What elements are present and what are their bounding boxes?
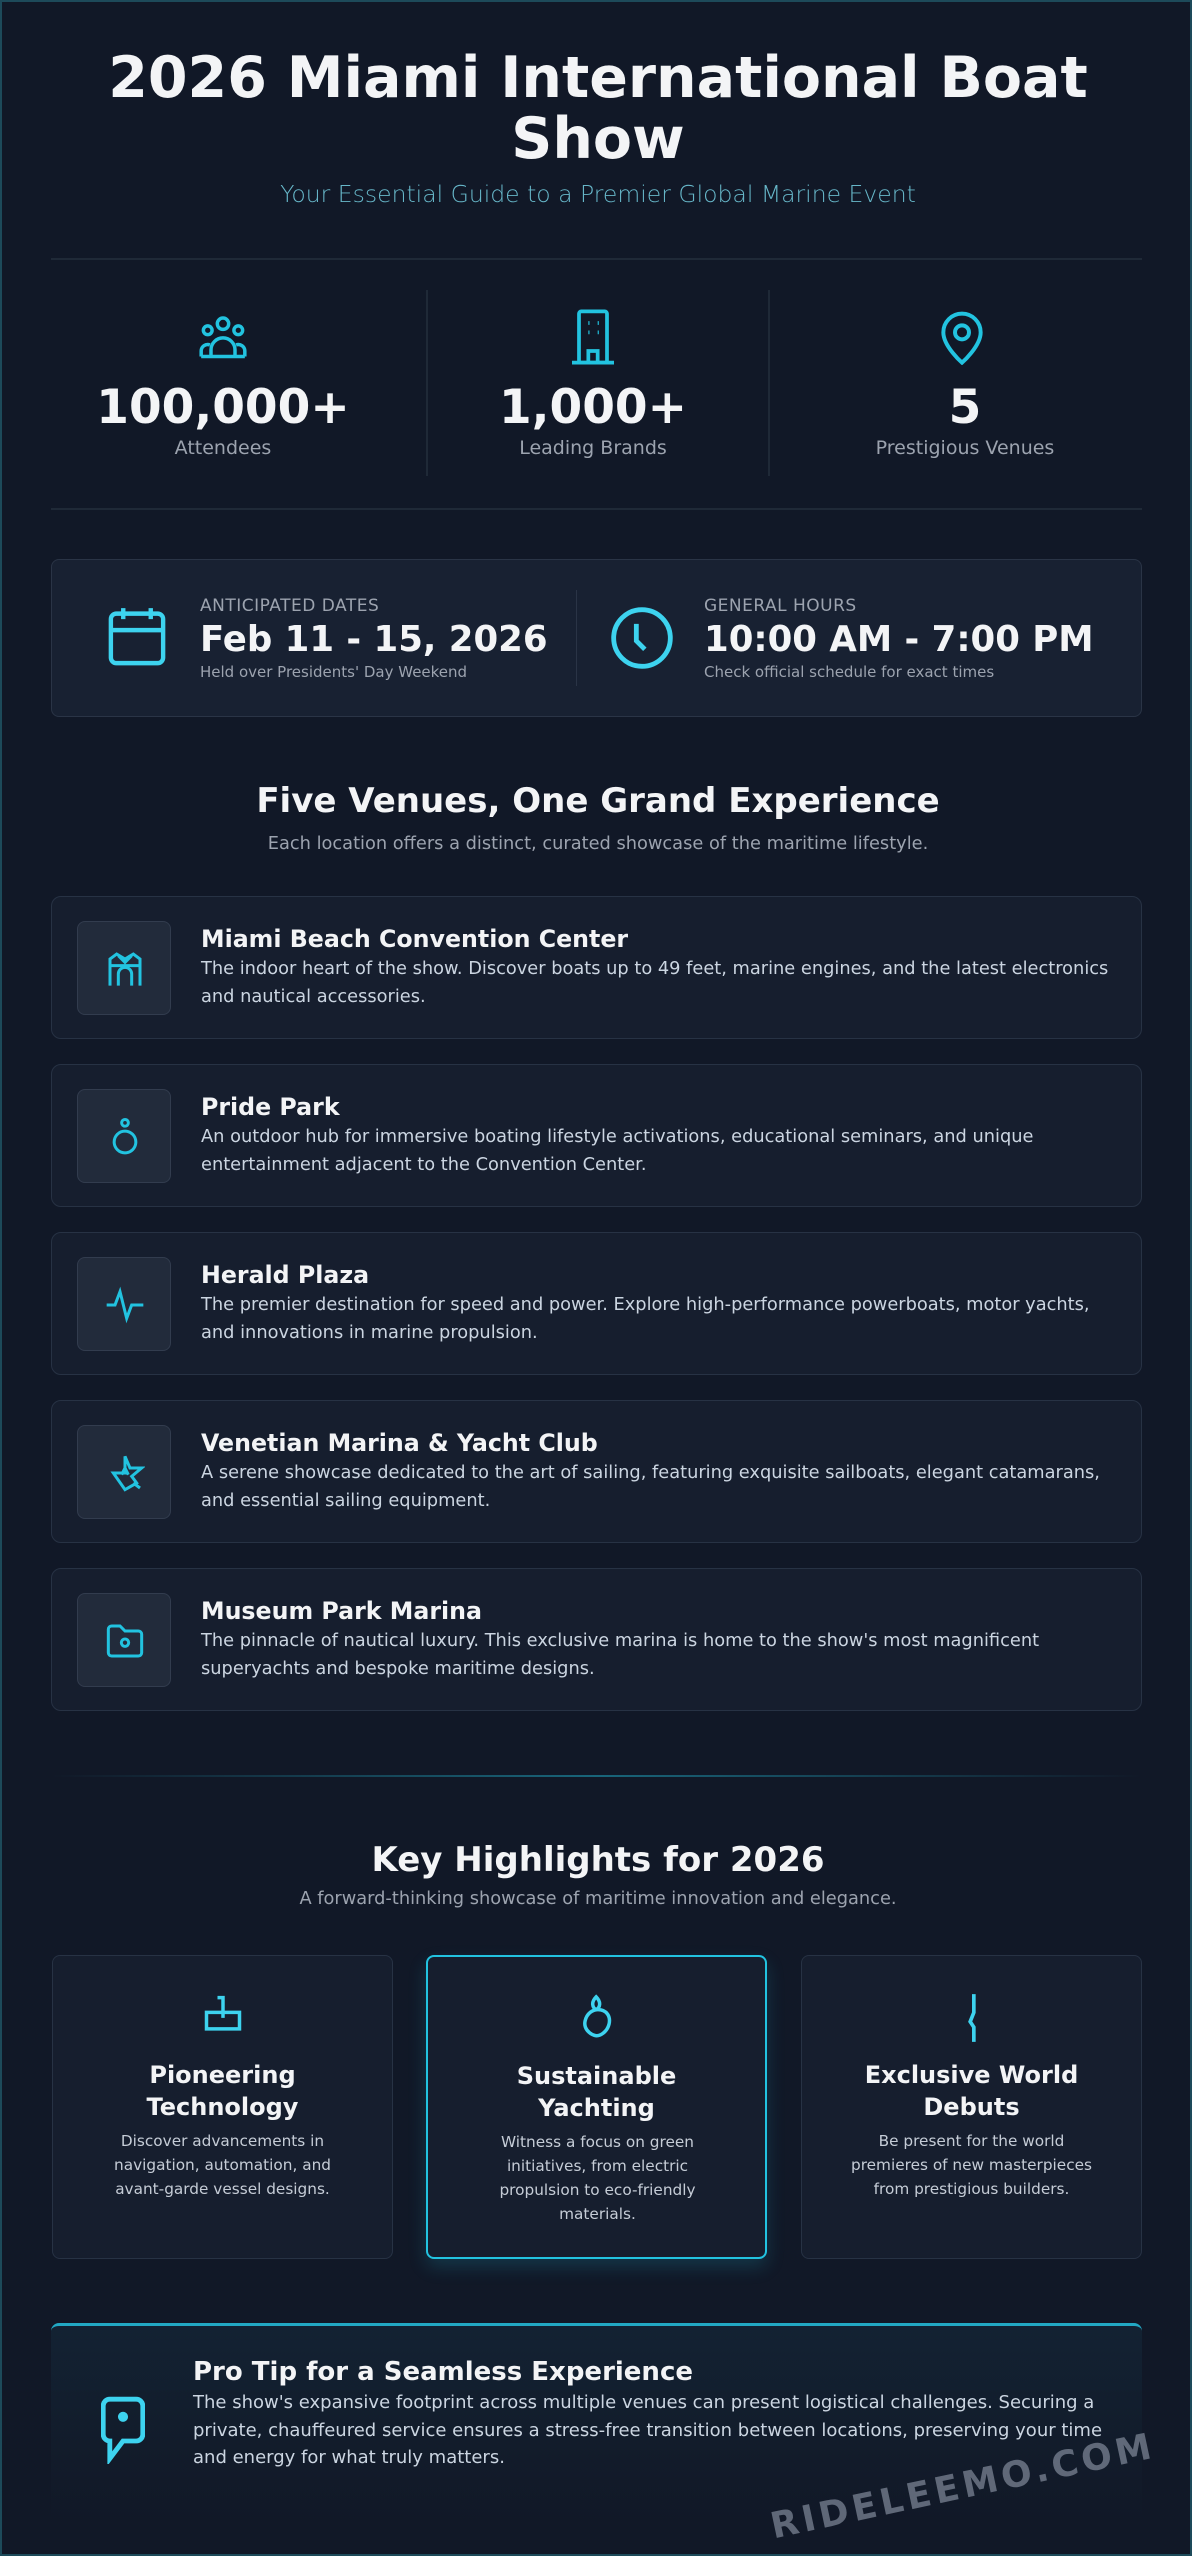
watermark: RIDELEEMO.COM — [767, 2426, 1159, 2547]
card: Herald Plaza: The premier destination for speed and power. Explore high-performance powerboats, motor yachts, and innovations in marine propulsion. — [201, 1294, 1090, 1343]
card: Sustainable Yachting: Sustainable — [517, 2062, 676, 2090]
panel: dates and hours — [51, 559, 1142, 717]
panel: dates and hours: ANTICIPATED DATES — [200, 596, 379, 616]
title: Show — [511, 106, 685, 172]
panel: dates and hours: Held over Presidents' Day Weekend — [200, 663, 467, 681]
card: Pioneering Technology: Pioneering — [149, 2061, 296, 2089]
panel: dates and hours: GENERAL HOURS — [704, 596, 857, 616]
icon: tech — [204, 1996, 242, 2031]
card: Exclusive World Debuts: Be present for the world premieres of new masterpieces from prestigious builders. — [851, 2132, 1092, 2198]
icon: people — [199, 316, 247, 358]
callout: pro tip: Pro Tip for a Seamless Experience — [193, 2357, 693, 2387]
stat: attendees: Attendees — [175, 437, 271, 459]
title: 2026 Miami International Boat — [108, 45, 1088, 111]
subtitle: Your Essential Guide to a Premier Global Marine Event — [280, 180, 916, 208]
card: Miami Beach Convention Center — [51, 896, 1142, 1039]
card: Venetian Marina & Yacht Club: A serene showcase dedicated to the art of sailing, featuring exquisite sailboats, elegant catamarans, and essential sailing equipment. — [201, 1462, 1100, 1511]
card: Sustainable Yachting: Yachting — [538, 2094, 655, 2122]
icon: star sail — [77, 1425, 171, 1519]
card: Herald Plaza — [51, 1232, 1142, 1375]
stat: brands: Leading Brands — [519, 437, 667, 459]
subheading: highlights: A forward-thinking showcase of maritime innovation and elegance. — [299, 1888, 897, 1909]
card: Museum Park Marina: Museum Park Marina — [201, 1597, 482, 1625]
card: Exclusive World Debuts: Exclusive World — [865, 2061, 1078, 2089]
card: Museum Park Marina — [51, 1568, 1142, 1711]
card: Pioneering Technology: Technology — [147, 2093, 298, 2121]
card: Museum Park Marina: The pinnacle of nautical luxury. This exclusive marina is home to the show's most magnificent superyachts and bespoke maritime designs. — [201, 1630, 1039, 1679]
icon: speech bubble — [101, 2396, 145, 2464]
panel: dates and hours: Check official schedule for exact times — [704, 663, 994, 681]
card: Exclusive World Debuts — [801, 1955, 1142, 2259]
icon: folder — [77, 1593, 171, 1687]
stat: attendees — [96, 316, 350, 459]
card: Pride Park — [51, 1064, 1142, 1207]
card: Pride Park: An outdoor hub for immersive boating lifestyle activations, educational seminars, and unique entertainment adjacent to the Convention Center. — [201, 1126, 1033, 1175]
card: Pride Park: Pride Park — [201, 1093, 340, 1121]
icon: convention — [77, 921, 171, 1015]
callout: pro tip — [51, 2323, 1142, 2523]
panel: dates and hours: 10:00 AM - 7:00 PM — [704, 619, 1094, 660]
card: Venetian Marina & Yacht Club — [51, 1400, 1142, 1543]
icon: leaf drop — [583, 1994, 612, 2038]
icon: building — [572, 310, 614, 364]
card: Miami Beach Convention Center: Miami Beach Convention Center — [201, 925, 628, 953]
stat: venues: 5 — [949, 380, 981, 435]
subheading: venues: Each location offers a distinct, curated showcase of the maritime lifestyle. — [268, 833, 928, 854]
icon: location pin — [941, 312, 983, 365]
icon: calendar — [108, 608, 166, 666]
callout: pro tip: The show's expansive footprint across multiple venues can present logistical challenges. Securing a private, chauffeured service ensures a stress-free transition between locations, preserving your time and energy for what truly matters. — [193, 2392, 1102, 2468]
card: Sustainable Yachting: Witness a focus on green initiatives, from electric propulsion to eco-friendly materials. — [499, 2133, 696, 2223]
icon: ring — [77, 1089, 171, 1183]
stat: brands: 1,000+ — [499, 380, 687, 435]
title — [108, 45, 1088, 172]
card: Venetian Marina & Yacht Club: Venetian Marina & Yacht Club — [201, 1429, 598, 1457]
icon: clock — [611, 607, 673, 669]
card: Sustainable Yachting — [426, 1955, 767, 2259]
heading: venues: Five Venues, One Grand Experience — [256, 781, 940, 821]
panel: dates and hours: Feb 11 - 15, 2026 — [200, 619, 548, 660]
card: Exclusive World Debuts: Debuts — [923, 2093, 1020, 2121]
card: Pioneering Technology: Discover advancements in navigation, automation, and avant-garde vessel designs. — [114, 2132, 331, 2198]
card: Pioneering Technology — [52, 1955, 393, 2259]
stat: brands — [499, 310, 687, 459]
icon: pulse — [77, 1257, 171, 1351]
stat: attendees: 100,000+ — [96, 380, 350, 435]
stat: venues — [876, 312, 1054, 459]
card: Herald Plaza: Herald Plaza — [201, 1261, 369, 1289]
icon: spark — [968, 1994, 976, 2042]
heading: highlights: Key Highlights for 2026 — [371, 1840, 825, 1880]
card: Miami Beach Convention Center: The indoor heart of the show. Discover boats up to 49 feet, marine engines, and the latest electronics and nautical accessories. — [201, 958, 1108, 1007]
stat: venues: Prestigious Venues — [876, 437, 1054, 459]
